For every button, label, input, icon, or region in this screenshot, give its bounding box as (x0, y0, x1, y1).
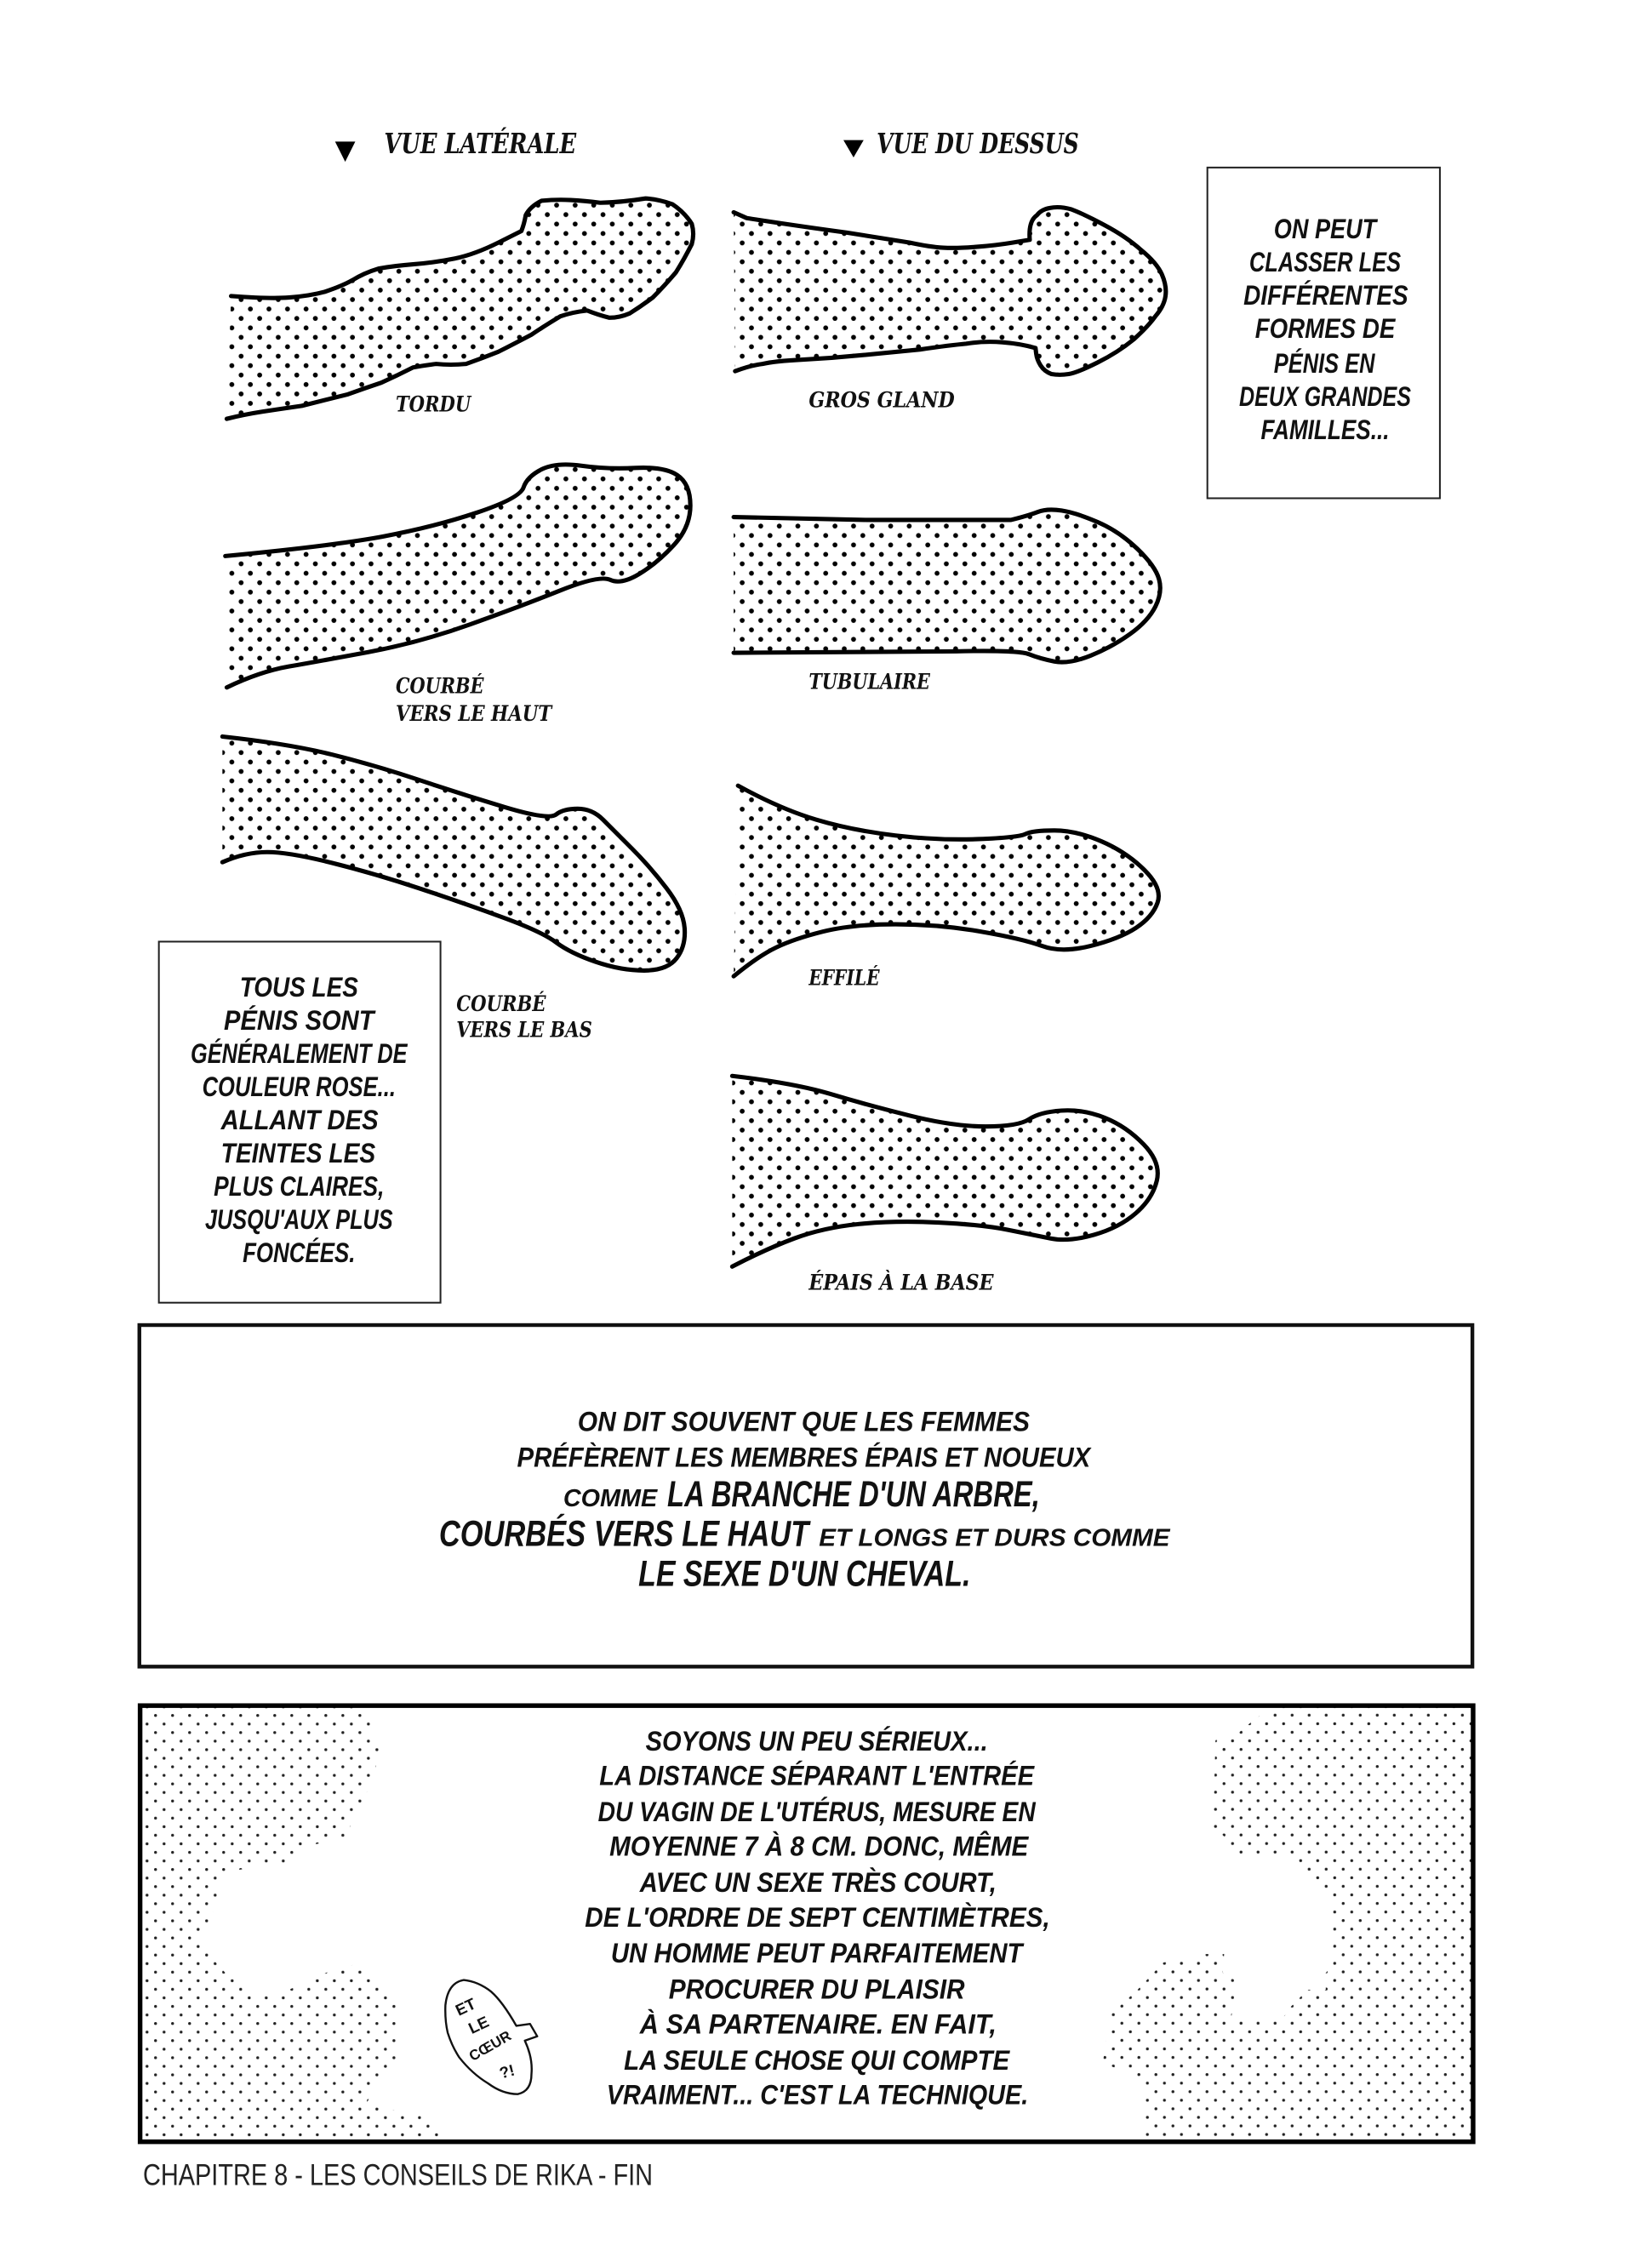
panel: couleur: TEINTES LES (221, 1138, 376, 1168)
panel: préférences: PRÉFÈRENT LES MEMBRES ÉPAIS ET NOUEUX (517, 1442, 1093, 1472)
shape: courbé vers le haut (226, 465, 690, 727)
panel: deux grandes familles: FAMILLES... (1260, 414, 1390, 445)
panel: couleur: GÉNÉRALEMENT DE (191, 1038, 408, 1069)
panel: deux grandes familles: PÉNIS EN (1274, 348, 1375, 379)
shape: tordu (226, 198, 694, 419)
shape: effilé: EFFILÉ (808, 963, 880, 991)
shape: épais à la base: ÉPAIS À LA BASE (808, 1268, 994, 1295)
panel: deux grandes familles (1208, 168, 1440, 498)
panel: préférences: COURBÉS VERS LE HAUT (439, 1514, 811, 1554)
heading: vue latérale (335, 128, 576, 162)
panel: couleur: COULEUR ROSE... (203, 1071, 396, 1102)
shape: courbé vers le bas (222, 736, 685, 1043)
speech bubble: ET (453, 1994, 479, 2019)
panel: deux grandes familles: FORMES DE (1255, 313, 1397, 344)
speech bubble: LE (466, 2013, 492, 2037)
panel: couleur: PLUS CLAIRES, (214, 1171, 384, 1202)
panel: deux grandes familles: DIFFÉRENTES (1243, 280, 1408, 311)
shape: courbé vers le haut: COURBÉ (396, 672, 484, 700)
shape: effilé (734, 786, 1158, 991)
panel: la technique: AVEC UN SEXE TRÈS COURT, (639, 1867, 997, 1898)
panel: couleur: TOUS LES (240, 972, 358, 1003)
shape: tordu: TORDU (396, 392, 472, 418)
shape: courbé vers le bas: VERS LE BAS (456, 1017, 592, 1043)
panel: la technique: UN HOMME PEUT PARFAITEMENT (611, 1938, 1025, 1968)
panel: deux grandes familles: CLASSER LES (1249, 247, 1401, 277)
footer: chapter end: CHAPITRE 8 - LES CONSEILS DE RIKA - FIN (143, 2160, 653, 2192)
shape: courbé vers le bas: COURBÉ (456, 990, 546, 1017)
panel: couleur: ALLANT DES (220, 1105, 379, 1135)
panel: deux grandes familles: ON PEUT (1274, 214, 1378, 244)
panel: la technique: MOYENNE 7 À 8 CM. DONC, MÊME (609, 1831, 1030, 1862)
panel: la technique: À SA PARTENAIRE. EN FAIT, (639, 2008, 997, 2039)
panel: préférences: LA BRANCHE D'UN ARBRE, (667, 1474, 1040, 1514)
panel: la technique: VRAIMENT... C'EST LA TECHNIQUE. (607, 2080, 1028, 2111)
panel: la technique: DU VAGIN DE L'UTÉRUS, MESURE EN (598, 1797, 1036, 1827)
panel: la technique: PROCURER DU PLAISIR (669, 1974, 965, 2005)
shape: gros gland (734, 208, 1166, 414)
speech bubble: CŒUR (466, 2027, 514, 2065)
panel: la technique (140, 1705, 1473, 2142)
panel: préférences (140, 1325, 1472, 1666)
panel: la technique: LA DISTANCE SÉPARANT L'ENTRÉE (599, 1761, 1035, 1791)
panel: couleur: FONCÉES. (243, 1237, 355, 1268)
panel: couleur: PÉNIS SONT (224, 1005, 376, 1036)
panel: préférences: COMME (563, 1485, 658, 1512)
panel: la technique: DE L'ORDRE DE SEPT CENTIMÈTRES, (585, 1902, 1050, 1933)
panel: la technique: SOYONS UN PEU SÉRIEUX... (646, 1726, 988, 1757)
speech bubble: ?! (497, 2061, 517, 2082)
heading: vue du dessus (843, 128, 1079, 160)
heading: vue latérale: VUE LATÉRALE (384, 128, 576, 160)
panel: couleur (159, 941, 441, 1303)
panel: la technique: LA SEULE CHOSE QUI COMPTE (624, 2045, 1011, 2076)
panel: préférences: LE SEXE D'UN CHEVAL. (638, 1553, 970, 1593)
panel: deux grandes familles: DEUX GRANDES (1239, 381, 1411, 412)
panel: préférences: ET LONGS ET DURS COMME (819, 1525, 1170, 1552)
speech bubble (445, 1980, 537, 2094)
shape: tubulaire: TUBULAIRE (808, 669, 930, 694)
shape: courbé vers le haut: VERS LE HAUT (396, 701, 553, 727)
shape: tubulaire (734, 510, 1160, 694)
shape: épais à la base (732, 1076, 1157, 1295)
panel: préférences: ON DIT SOUVENT QUE LES FEMMES (578, 1407, 1030, 1437)
heading: vue du dessus: VUE DU DESSUS (877, 128, 1079, 160)
panel: couleur: JUSQU'AUX PLUS (205, 1204, 393, 1235)
shape: gros gland: GROS GLAND (808, 388, 955, 414)
